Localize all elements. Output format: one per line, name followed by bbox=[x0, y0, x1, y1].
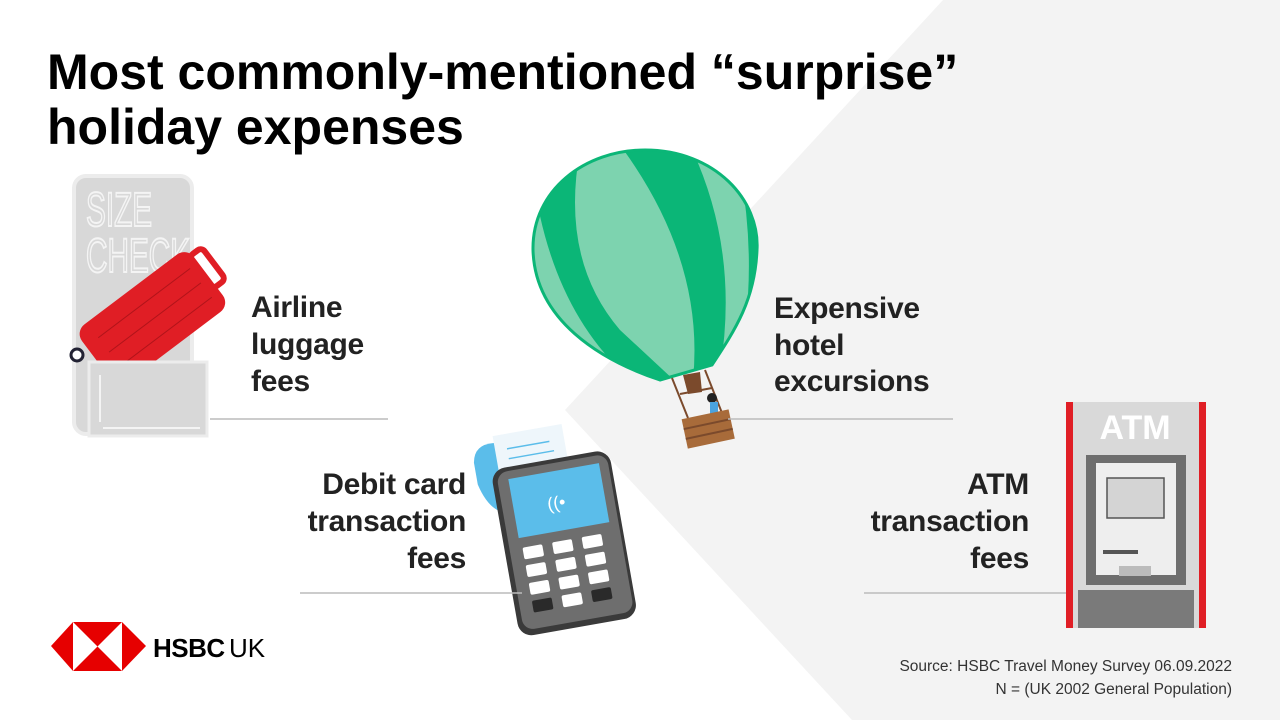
title: Most commonly-mentioned “surprise” bbox=[47, 44, 958, 100]
source note: N = (UK 2002 General Population) bbox=[995, 681, 1232, 698]
label: ATM transaction fees bbox=[871, 468, 1029, 575]
label: ATM transaction fees: fees bbox=[970, 542, 1029, 575]
icon: size check luggage: SIZE bbox=[86, 184, 152, 237]
icon: card terminal: ((• bbox=[546, 492, 567, 515]
background diagonal panel bbox=[565, 0, 1280, 720]
source note: Source: HSBC Travel Money Survey 06.09.2022 bbox=[899, 658, 1232, 675]
icon: size check luggage bbox=[71, 176, 240, 436]
label: debit card transaction fees: transaction bbox=[308, 505, 466, 538]
label: ATM transaction fees: ATM bbox=[967, 468, 1029, 501]
icon: ATM: ATM bbox=[1099, 409, 1171, 447]
label: expensive hotel excursions: excursions bbox=[774, 365, 929, 398]
label: expensive hotel excursions: Expensive bbox=[774, 292, 920, 325]
label: expensive hotel excursions: hotel bbox=[774, 329, 844, 362]
icon: hot air balloon bbox=[530, 145, 765, 449]
icon: ATM bbox=[1066, 402, 1206, 628]
logo: HSBC UK: UK bbox=[229, 633, 266, 663]
label: expensive hotel excursions bbox=[774, 292, 929, 398]
label: airline luggage fees bbox=[251, 291, 364, 398]
label: debit card transaction fees: Debit card bbox=[322, 468, 466, 501]
title bbox=[47, 44, 958, 155]
icon: size check luggage: CHECK bbox=[86, 230, 190, 283]
logo: HSBC UK: HSBC bbox=[153, 633, 225, 663]
label: debit card transaction fees bbox=[308, 468, 466, 575]
label: debit card transaction fees: fees bbox=[407, 542, 466, 575]
icon: card terminal bbox=[470, 417, 638, 640]
logo: HSBC UK bbox=[51, 622, 266, 671]
title: holiday expenses bbox=[47, 99, 464, 155]
source note bbox=[899, 658, 1232, 698]
label: ATM transaction fees: transaction bbox=[871, 505, 1029, 538]
label: airline luggage fees: luggage bbox=[251, 328, 364, 361]
label: airline luggage fees: fees bbox=[251, 365, 310, 398]
label: airline luggage fees: Airline bbox=[251, 291, 342, 324]
